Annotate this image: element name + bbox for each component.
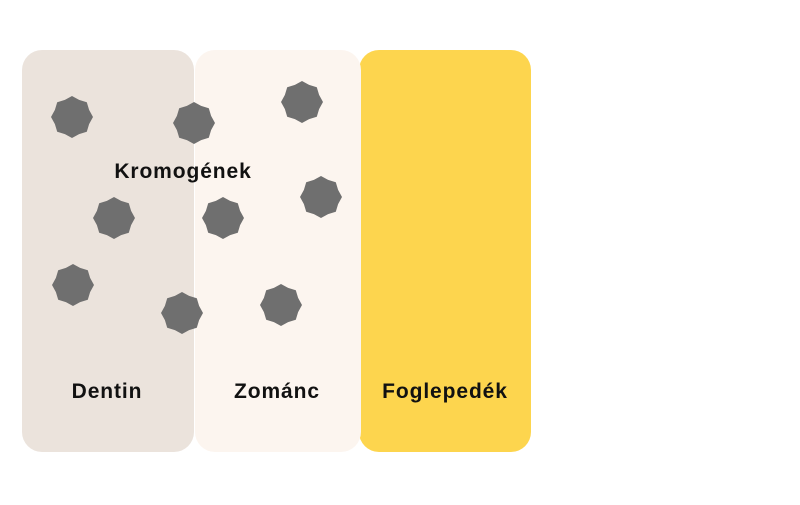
- panel: foglepedek: [359, 50, 531, 452]
- label: dentin: Dentin: [72, 380, 142, 403]
- label: kromogenek: Kromogének: [114, 160, 252, 183]
- panel: zomanc: [195, 50, 361, 452]
- label: foglepedek: Foglepedék: [382, 380, 508, 403]
- chromogen particles: [51, 81, 342, 334]
- panel: dentin: [22, 50, 194, 452]
- label: zomanc: Zománc: [234, 380, 320, 403]
